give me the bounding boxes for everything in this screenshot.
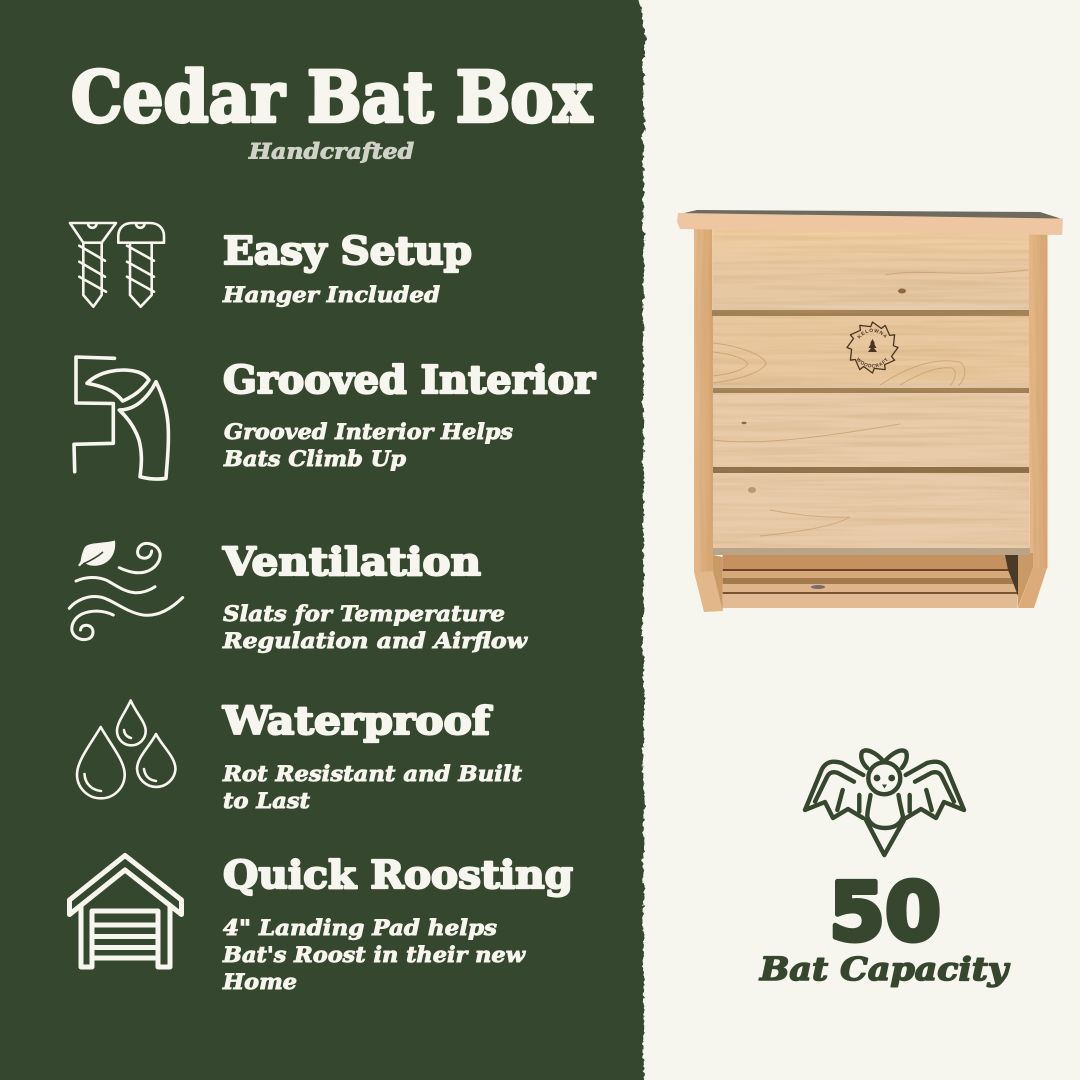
icon: house with garage door xyxy=(70,856,182,967)
heading: grooved interior: Grooved Interior xyxy=(223,358,596,403)
capacity label: Bat Capacity xyxy=(759,950,1011,988)
icon: groove profile xyxy=(74,357,168,479)
wood knots xyxy=(742,288,906,493)
icon: water drops xyxy=(77,700,176,798)
text: grooved interior description: Grooved Interior Helps xyxy=(224,419,513,444)
heading: waterproof: Waterproof xyxy=(222,699,493,744)
capacity number: 50 xyxy=(829,866,941,959)
text: waterproof description: Rot Resistant and Built xyxy=(222,761,522,786)
roof front edge xyxy=(677,213,1063,235)
logo: saw blade stamp: KELOWNA xyxy=(857,328,887,339)
text: ventilation description xyxy=(222,601,528,653)
shingle panels xyxy=(712,228,1030,555)
text: ventilation description: Regulation and Airflow xyxy=(222,628,528,653)
text: quick roosting description: Bat's Roost in their new xyxy=(222,942,526,967)
icon: wind and leaf xyxy=(69,540,183,640)
left post xyxy=(694,229,723,612)
product illustration: cedar bat box xyxy=(677,210,1063,612)
text: quick roosting description xyxy=(222,915,526,994)
text: ventilation description: Slats for Temperature xyxy=(223,601,505,626)
heading: ventilation: Ventilation xyxy=(222,540,481,585)
feature: ventilation xyxy=(69,540,528,653)
heading: quick roosting: Quick Roosting xyxy=(223,853,573,898)
feature: waterproof xyxy=(77,699,522,813)
logo: saw blade stamp xyxy=(846,321,899,374)
feature: quick roosting xyxy=(70,853,573,994)
text: grooved interior description: Bats Climb Up xyxy=(223,446,406,471)
text: quick roosting description: 4" Landing Pad helps xyxy=(223,915,497,940)
text: quick roosting description: Home xyxy=(222,969,297,994)
feature: easy setup xyxy=(70,223,472,307)
logo: saw blade stamp: WOODCRAFT xyxy=(856,357,888,368)
wood grain texture xyxy=(713,230,1029,548)
feature: grooved interior xyxy=(74,357,596,479)
roof top shadow xyxy=(680,210,1062,219)
text: waterproof description xyxy=(222,761,522,813)
subtitle: Handcrafted xyxy=(248,138,414,164)
text: grooved interior description xyxy=(223,419,513,471)
post grain texture xyxy=(694,229,1048,572)
text: hanger included: Hanger Included xyxy=(222,282,440,307)
icon: bat xyxy=(805,750,964,855)
title: Cedar Bat Box xyxy=(71,56,593,138)
bottom slats xyxy=(723,555,1018,608)
panel: dark green features panel with torn edge xyxy=(0,0,646,1080)
heading: easy setup: Easy Setup xyxy=(223,229,472,274)
text: waterproof description: to Last xyxy=(223,788,310,813)
wood grain rings xyxy=(713,270,1028,536)
icon: screws xyxy=(70,223,164,307)
right post xyxy=(1018,233,1048,608)
